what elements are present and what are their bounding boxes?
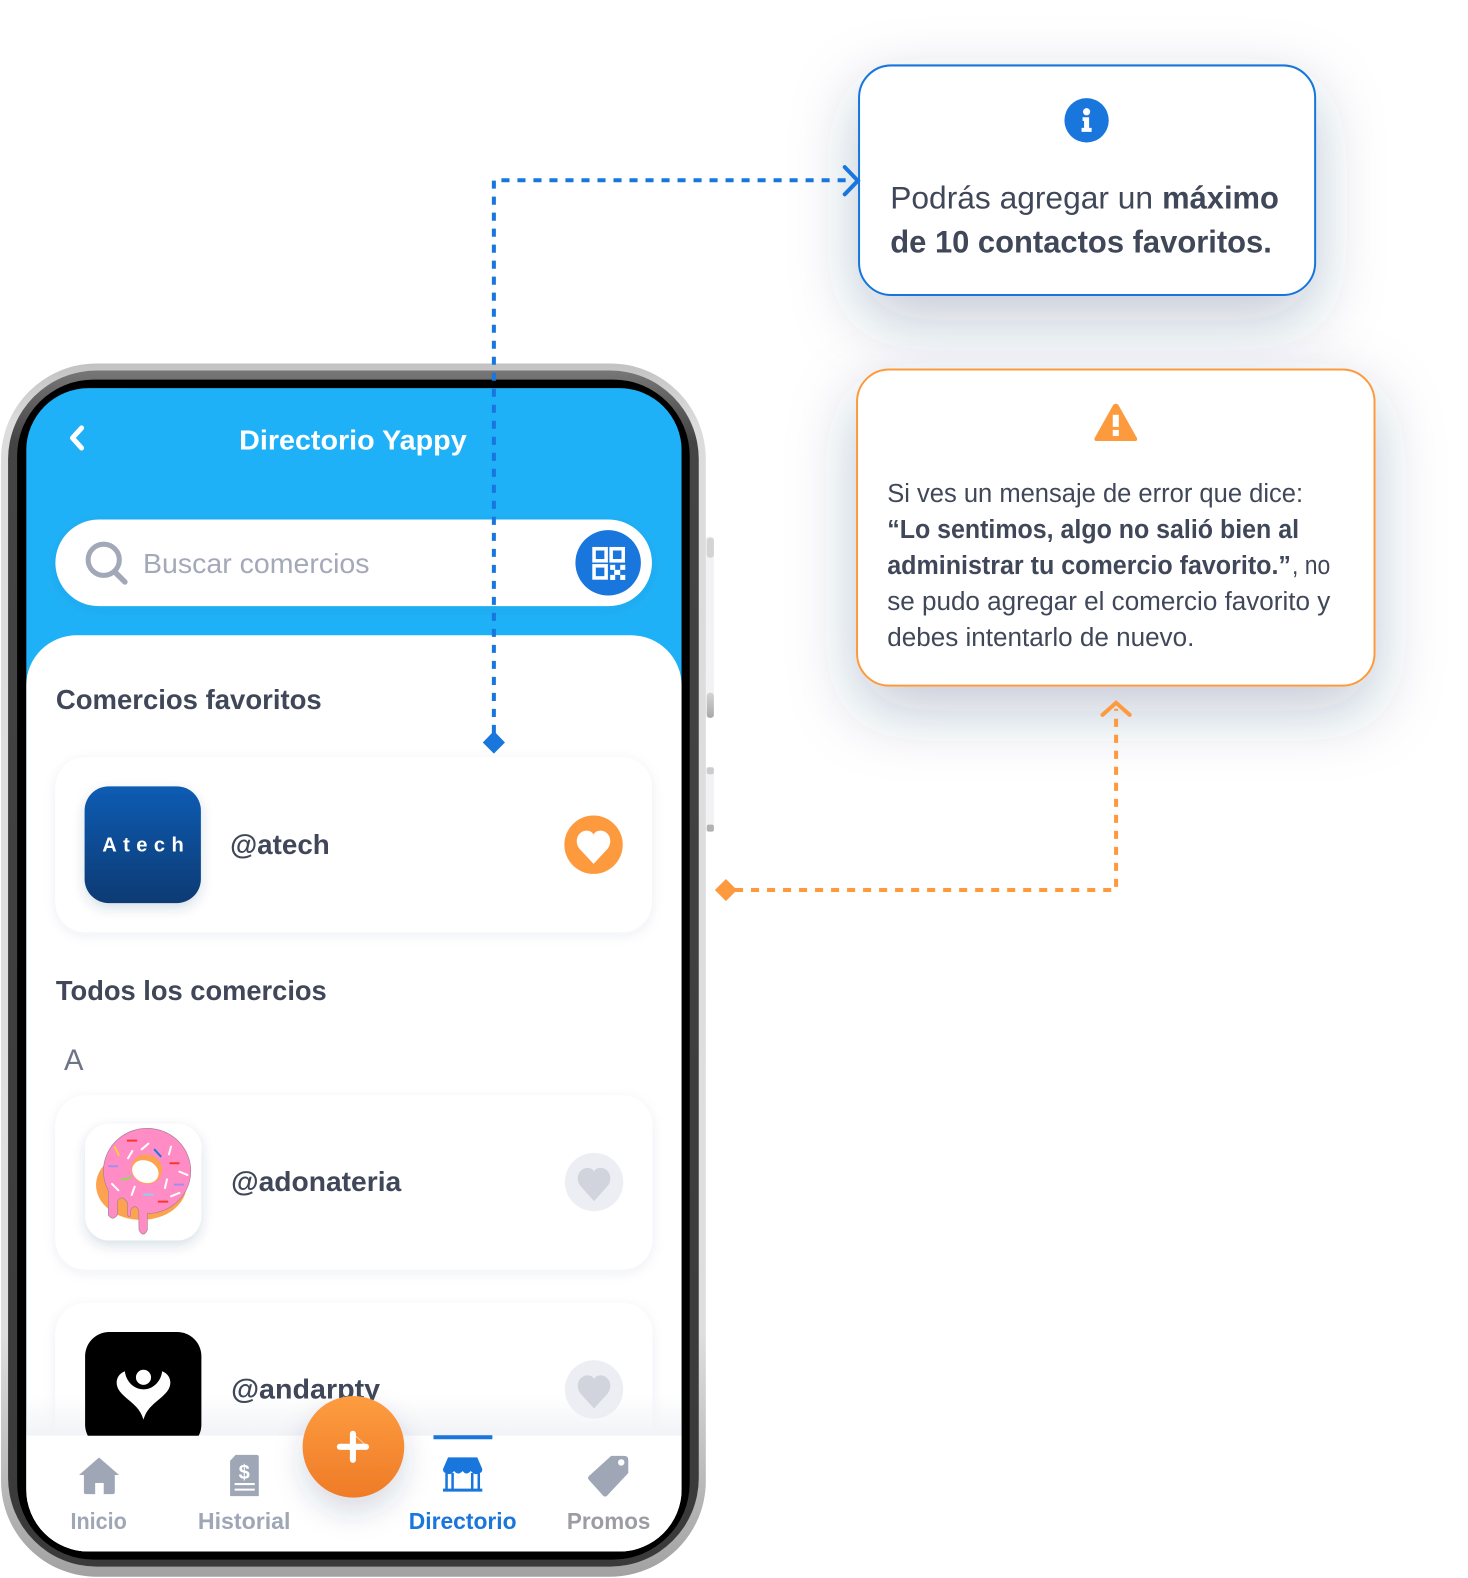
callout text: administrar tu comercio favorito.” [887, 550, 1291, 580]
nav item: Directorio (active) [409, 1435, 517, 1534]
icon: inactive heart [565, 1360, 623, 1419]
bottom navigation [26, 1435, 682, 1557]
section letter: A [64, 1045, 84, 1077]
callout text: Podrás agregar un [890, 180, 1153, 215]
callout text: máximo [1162, 180, 1279, 215]
handle: adonateria: @adonateria [231, 1165, 402, 1197]
nav item: Historial: $ [239, 1462, 250, 1484]
callout text: se pudo agregar el comercio favorito y [887, 586, 1331, 616]
nav item: Historial: Historial [198, 1508, 290, 1534]
card: adonateria [55, 1128, 653, 1273]
phone screen [26, 388, 682, 1578]
nav item: Promos: Promos [567, 1508, 650, 1534]
callout: info [859, 65, 1315, 295]
handle: atech: @atech [230, 828, 330, 860]
card: atech [55, 786, 652, 936]
callout text: Si ves un mensaje de error que dice: [887, 478, 1303, 508]
nav item: Inicio [71, 1457, 127, 1534]
callout text [890, 180, 1279, 260]
phone side buttons [705, 537, 714, 832]
heading: favoritos: Comercios favoritos [56, 683, 322, 715]
nav item: Inicio: Inicio [71, 1508, 127, 1534]
icon: active heart [564, 816, 623, 874]
search placeholder: Buscar comercios [143, 547, 370, 579]
connector: blue dashed arrow [483, 167, 858, 754]
nav item: Directorio (active): Directorio [409, 1508, 517, 1534]
icon: QR button [575, 530, 641, 596]
list fade above navigation [26, 1402, 682, 1436]
icon: inactive heart [565, 1153, 623, 1211]
search bar [55, 520, 652, 606]
callout text: , no [1292, 550, 1330, 580]
floating add button [303, 1396, 404, 1498]
callout text: “Lo sentimos, algo no salió bien al [887, 514, 1299, 544]
card: andarpty [26, 1332, 682, 1436]
nav item: Historial [198, 1455, 290, 1534]
heading: todos: Todos los comercios [56, 974, 327, 1006]
logo: Atech [85, 786, 201, 903]
logo: andar [85, 1332, 202, 1436]
content sheet [26, 635, 682, 1578]
callout text: debes intentarlo de nuevo. [887, 622, 1194, 652]
callout: warning [857, 370, 1375, 686]
logo: Atech: Atech [102, 834, 184, 856]
icon: info [1064, 98, 1109, 142]
nav item: Promos [567, 1456, 650, 1534]
phone frame [1, 363, 706, 1577]
handle: andarpty: @andarpty [231, 1372, 380, 1404]
icon: warning [1094, 404, 1137, 441]
app title: Directorio Yappy [239, 424, 467, 456]
logo: donut [85, 1124, 201, 1240]
callout text: de 10 contactos favoritos. [890, 225, 1272, 260]
icon: back chevron [73, 428, 82, 448]
icon: magnifier [88, 544, 125, 582]
callout text [887, 478, 1331, 652]
connector: orange dashed arrow [715, 703, 1130, 901]
